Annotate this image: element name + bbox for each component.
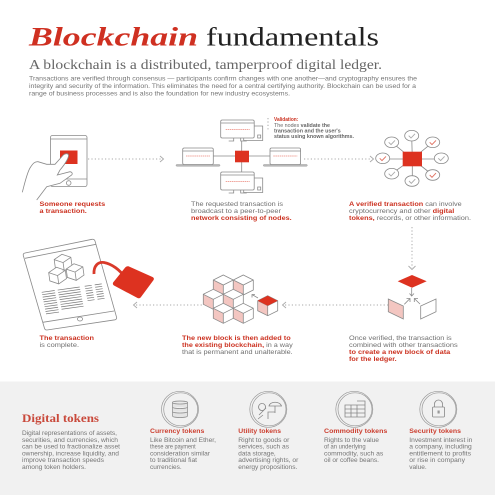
text: utility tokens: Utility tokens [238,428,281,435]
heading: digital tokens: Digital tokens [22,411,99,425]
text: step 5 [182,335,293,356]
icon: padlock [420,391,457,427]
title: fundamentals [206,22,379,52]
text: commodity tokens [324,428,388,464]
text: utility tokens: advertising rights, or [238,457,299,464]
text: security tokens [409,428,473,471]
text: security tokens: Investment interest in [409,437,473,444]
text: utility tokens [238,428,299,471]
text: step 5: The new block is then added to [182,335,291,342]
text: digital tokens description: can be used to fractionalize asset [22,444,120,451]
token: commodity [324,391,388,464]
text: step 5: that is permanent and unalterable. [182,349,293,356]
icon: barrels and sack [336,391,373,427]
icon: tablet with hand [22,136,87,200]
network of nodes diagram [176,120,307,193]
text: digital tokens description: among token holders. [22,464,86,471]
text: step 2: The requested transaction is [191,201,284,208]
text: step 6: is complete. [40,342,79,349]
text: digital tokens description: securities, and currencies, which [22,437,118,444]
arrow: step 5 to 6 [134,302,204,308]
arrow: step 3 to 4 [408,227,416,270]
text: step 4: combined with other transactions [349,342,458,349]
token: utility [238,391,299,471]
intro paragraph: Transactions are verified through consensus — participants confirm changes with one another—and cryptography ensures the [29,76,417,82]
text: commodity tokens: oil or coffee beans. [324,457,379,464]
text: currency tokens: Like Bitcoin and Ether, [150,437,216,444]
text: commodity tokens: of an underlying [324,444,366,451]
text: security tokens: or rise in company [409,457,466,464]
step 6: transaction complete [23,239,154,349]
text: currency tokens: currencies. [150,464,182,471]
token: security [409,391,473,471]
text: digital tokens description: Digital representations of assets, [22,430,117,437]
text: step 4 [349,335,458,363]
step 1: someone requests a transaction [22,136,105,215]
text: security tokens: value. [409,464,427,471]
icon: blockchain cubes [203,275,278,323]
text: step 3: tokens, records, or other information. [349,215,471,222]
token: currency [150,391,216,471]
text: commodity tokens: Commodity tokens [324,428,388,435]
text: utility tokens: services, such as [238,444,289,451]
icon: key and umbrella [250,391,287,427]
intro paragraph: range of business processes and is also the foundation for new industry ecosystems. [29,90,290,98]
text: security tokens: a company, including [409,444,472,451]
icon: tablet ledger [23,239,117,330]
panel: digital tokens [0,382,495,495]
text: step 1: Someone requests [40,201,105,208]
text: security tokens: entitlement to profits [409,450,471,457]
text: step 6: The transaction [40,335,94,342]
step 4: new block of data [349,275,458,363]
title: Blockchain [28,22,198,52]
text: step 1 [40,201,105,215]
icon: block assembling [388,275,436,319]
text: step 4: for the ledger. [349,356,397,363]
text: currency tokens: Currency tokens [150,428,205,435]
intro paragraph: integrity and security of the information. This eliminates the need for a central certifying authority. Blockchain can be used for a [29,83,416,90]
intro paragraph [29,76,417,98]
text: step 2: broadcast to a peer-to-peer [191,208,282,215]
text: commodity tokens: commodity, such as [324,450,383,457]
subtitle: A blockchain is a distributed, tamperproof digital ledger. [29,57,382,72]
text: currency tokens [150,428,216,471]
text: step 3: A verified transaction can involve [349,201,462,208]
text: step 1: a transaction. [40,208,87,215]
hub with checkmark nodes [376,130,448,186]
arrow: step 4 to 5 [282,302,388,308]
text: digital tokens description [22,430,120,471]
title [28,22,379,52]
text: security tokens: Security tokens [409,428,461,435]
text: utility tokens: Right to goods or [238,437,290,444]
text: step 4: to create a new block of data [349,349,451,356]
step 3: verified transaction [349,130,471,222]
arrow: step 1 to 2 [88,156,164,162]
text: step 6 [40,335,94,349]
callout: validation: transaction and the user's [274,128,341,134]
text: step 2: network consisting of nodes. [191,215,292,222]
text: utility tokens: energy propositions. [238,464,298,471]
text: currency tokens: consideration similar [150,450,211,457]
step 5: block added to blockchain [182,275,293,356]
text: digital tokens description: improve transaction speeds [22,457,104,464]
callout: validation: Validation: [274,117,299,123]
text: digital tokens description: ownership, increase liquidity, and [22,450,119,457]
text: step 3: cryptocurrency and other digital [349,208,454,215]
text: commodity tokens: Rights to the value [324,437,379,444]
callout: validation [268,117,355,140]
text: step 3 [349,201,471,222]
callout: validation: The nodes validate the [274,123,330,129]
text: currency tokens: these are payment [150,444,196,451]
text: utility tokens: data storage, [238,450,276,457]
icon: red padlock [94,262,154,298]
text: currency tokens: to traditional fiat [150,457,197,464]
text: step 4: Once verified, the transaction is [349,335,452,342]
step 2: peer-to-peer network [176,117,355,222]
arrow: step 2 to 3 [304,156,374,162]
text: step 5: the existing blockchain, in a way [182,342,293,349]
text: step 2 [191,201,292,222]
callout: validation: status using known algorithms. [274,134,355,140]
icon: coin stack [162,391,198,427]
